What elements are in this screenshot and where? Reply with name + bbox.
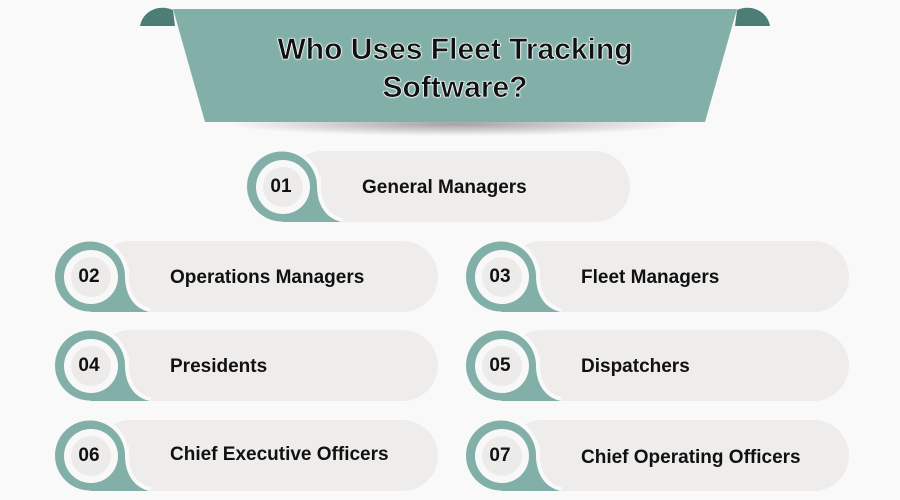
item 04: Presidents <box>170 356 267 377</box>
item 06: Chief Executive Officers <box>170 444 389 465</box>
item 02: Operations Managers <box>170 267 364 288</box>
item 01 <box>247 151 630 222</box>
item 04 <box>55 330 438 401</box>
title text <box>276 33 633 104</box>
item 03 <box>466 241 849 312</box>
item 06 <box>55 420 438 491</box>
item 07 <box>466 420 849 491</box>
item 07: Chief Operating Officers <box>581 447 801 468</box>
item 03: 03 <box>489 266 511 287</box>
item 04: 04 <box>78 355 100 376</box>
item 02 <box>55 241 438 312</box>
item 07: 07 <box>489 445 511 466</box>
item 05: Dispatchers <box>581 356 690 377</box>
item 01: 01 <box>270 176 292 197</box>
item 01: General Managers <box>362 177 527 198</box>
item 03: Fleet Managers <box>581 267 719 288</box>
item 02: 02 <box>78 266 100 287</box>
item 06: 06 <box>78 445 100 466</box>
title text: Software? <box>382 71 528 104</box>
title text: Who Uses Fleet Tracking <box>277 33 633 66</box>
item 05: 05 <box>489 355 511 376</box>
title banner <box>140 8 770 135</box>
item 05 <box>466 330 849 401</box>
